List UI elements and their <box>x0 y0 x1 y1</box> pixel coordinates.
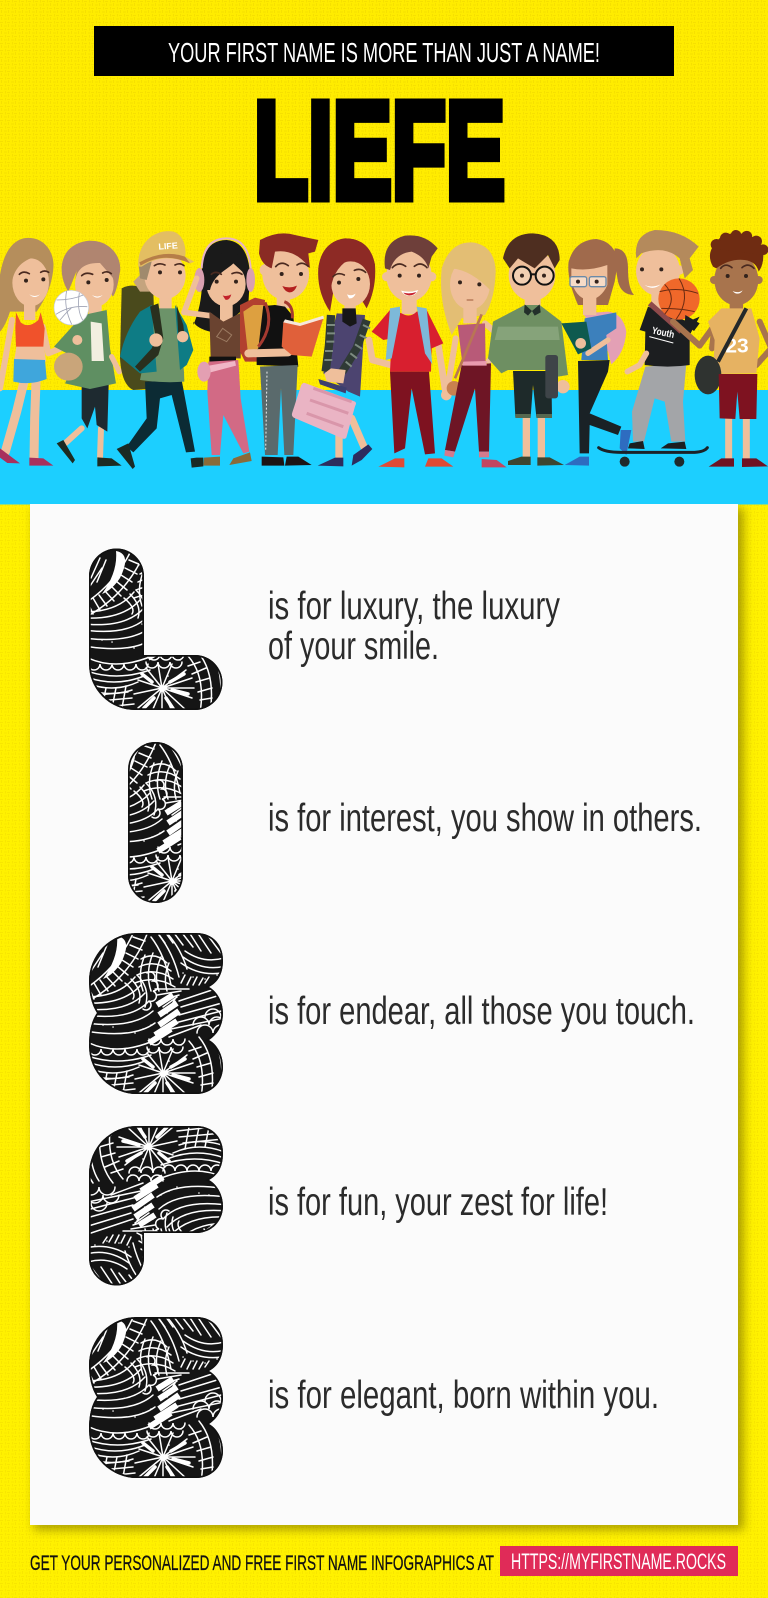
yellow header field <box>0 0 768 392</box>
person: girl with pink bag <box>292 238 375 466</box>
row: letter L <box>89 548 560 710</box>
person: blonde girl <box>441 242 507 467</box>
patterned letter I <box>128 742 183 903</box>
person: boy with glasses in green sweater <box>488 233 570 466</box>
row: letter F <box>89 1126 606 1286</box>
person: girl in orange top <box>0 238 77 466</box>
crowd of twelve students <box>0 230 768 469</box>
text: luxury <box>268 585 560 668</box>
person: girl with ponytail and glasses <box>561 239 634 466</box>
white content panel <box>30 504 738 1525</box>
patterned letter E <box>89 933 223 1094</box>
patterned letter E <box>89 1317 223 1478</box>
person: backpacker with yellow cap <box>117 231 203 469</box>
person: girl with pink headphones <box>184 238 255 466</box>
right four students <box>488 230 768 467</box>
person: backpacker with yellow cap: LIFE <box>158 240 178 252</box>
patterned letter F <box>89 1126 223 1286</box>
text: luxury: of your smile. <box>268 625 439 668</box>
person: boy in yellow tank top <box>673 230 768 467</box>
person: boy in red shirt <box>369 235 453 467</box>
person: girl in green jacket with volleyball <box>54 241 122 466</box>
top banner <box>94 26 674 76</box>
row: letter I <box>128 742 700 903</box>
text: fun: is for fun, your zest for life! <box>268 1181 608 1224</box>
middle four students <box>240 233 507 467</box>
patterned letter L <box>89 548 222 710</box>
white panel shadow <box>34 508 744 1530</box>
blue floor band <box>0 390 768 504</box>
text: luxury: is for luxury, the luxury <box>268 585 560 628</box>
person: skateboarder with basketball <box>599 230 707 467</box>
person: boy in yellow tank top: 23 <box>725 334 749 357</box>
row: letter E <box>89 933 692 1094</box>
row: letter E second <box>89 1317 656 1478</box>
title name: LIEFE <box>254 74 505 228</box>
person: skateboarder with basketball: Youth <box>651 326 675 341</box>
person: boy with red backpack and book <box>240 233 324 466</box>
left four students <box>0 231 255 469</box>
footer call to action: GET YOUR PERSONALIZED AND FREE FIRST NAME INFOGRAPHICS AT <box>30 1552 494 1575</box>
